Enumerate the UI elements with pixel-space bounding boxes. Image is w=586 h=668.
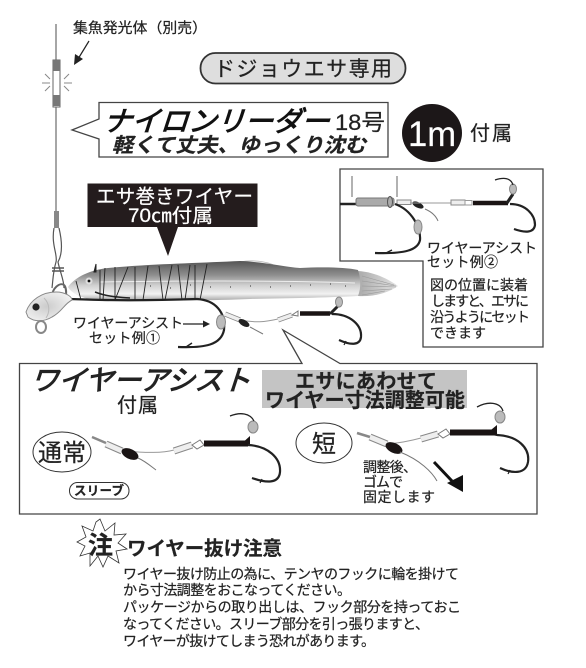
text: set example note: できます — [430, 325, 486, 341]
label: normal — [33, 432, 91, 472]
text: caution body — [123, 566, 461, 649]
badge: loach bait only — [200, 53, 406, 84]
text: after adjustment: ゴムで — [363, 474, 403, 490]
black label: bait wrap wire — [88, 184, 258, 256]
label: short — [296, 423, 352, 463]
black label: bait wrap wire: 70㎝付属 — [128, 205, 213, 227]
text: caution body: ワイヤーが抜けてしまう恐れがあります。 — [123, 633, 375, 649]
callout: nylon leader — [72, 102, 388, 157]
icon: caution starburst — [77, 519, 127, 567]
arrow: pull direction — [434, 462, 463, 492]
label: luminous body sold separately: 集魚発光体（別売） — [73, 20, 207, 37]
text: caution body: なってください。スリーブ部分を引っ張りますと、 — [123, 616, 429, 632]
label: set example 1: ワイヤーアシスト — [73, 315, 183, 331]
callout: nylon leader: ナイロンリーダー — [101, 107, 337, 138]
wire assist set example 1 — [178, 297, 361, 347]
badge: 1m included: 1m — [408, 115, 456, 154]
badge: 1m included — [402, 104, 512, 162]
heading: wire assist: ワイヤーアシスト — [28, 366, 258, 397]
jig head — [26, 284, 72, 333]
diagram: normal assist — [92, 414, 280, 483]
text: caution body: ワイヤー抜け防止の為に、テンヤのフックに輪を掛けて — [123, 566, 459, 582]
badge: 1m included: 付属 — [470, 122, 512, 145]
arrow: to luminous body — [74, 41, 89, 65]
text: caution body: パッケージからの取り出しは、フック部分を持っておこ — [123, 599, 461, 615]
badge: loach bait only: ドジョウエサ専用 — [214, 58, 392, 81]
text: set example note: 沿うようにセット — [430, 309, 530, 325]
text: set example note — [430, 277, 530, 341]
panel: wire assist — [20, 330, 537, 514]
callout: nylon leader: 18号 — [335, 110, 385, 135]
label: set example 1: セット例① — [89, 330, 160, 346]
text: after adjustment: 固定します — [363, 489, 435, 505]
label: short: 短 — [312, 431, 336, 458]
label: adjustable length — [262, 370, 467, 412]
swivel and wire to jig — [52, 211, 64, 288]
callout: nylon leader: 軽くて丈夫、ゆっくり沈む — [111, 134, 370, 157]
panel: set example 2: セット例② — [427, 254, 498, 270]
wire wrap on bait — [68, 264, 207, 300]
diagram: shortened assist — [357, 403, 528, 481]
label: set example 2: ワイヤーアシスト — [427, 240, 537, 256]
label: adjustable length: ワイヤー寸法調整可能 — [265, 389, 465, 412]
leader line with luminous body — [42, 24, 72, 212]
heading: wire pull-out caution: ワイヤー抜け注意 — [127, 538, 282, 560]
text: caution body: から寸法調整をおこなってください。 — [123, 582, 351, 598]
text: set example note: しますと、エサに — [431, 293, 529, 309]
text: included: 付属 — [117, 394, 158, 417]
text: set example note: 図の位置に装着 — [430, 277, 528, 293]
fish bait — [68, 261, 398, 301]
panel: set example 2 — [340, 169, 543, 347]
text: after adjustment — [363, 459, 435, 505]
label: set example 1 — [73, 315, 210, 346]
diagram: hook on jig — [340, 176, 535, 253]
icon: caution starburst: 注 — [88, 532, 113, 560]
label: sleeve: スリーブ — [74, 483, 124, 498]
label: adjustable length: エサにあわせて — [295, 370, 437, 393]
label: normal: 通常 — [38, 440, 86, 467]
black label: bait wrap wire: エサ巻きワイヤー — [96, 186, 253, 208]
text: after adjustment: 調整後、 — [363, 459, 417, 475]
